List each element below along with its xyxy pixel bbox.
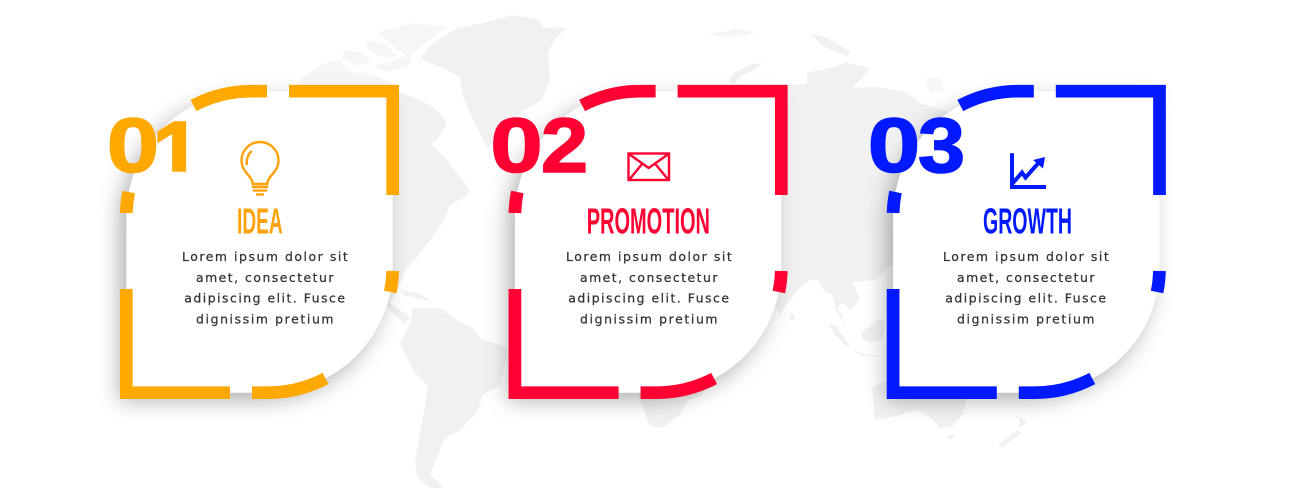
number 02: 0 xyxy=(490,103,543,189)
heading: growth: GROWTH xyxy=(983,200,1072,241)
map: new zealand south xyxy=(998,430,1022,447)
text block: adipiscing elit. Fusce xyxy=(568,291,729,306)
map: sumatra xyxy=(828,322,850,347)
icon: envelope xyxy=(628,154,669,180)
panel: promotion xyxy=(490,91,781,401)
number 02 xyxy=(490,103,588,189)
map: borneo xyxy=(862,318,885,343)
map: south america xyxy=(400,308,508,488)
card xyxy=(126,91,393,393)
map: arctic islands xyxy=(300,23,447,86)
text block xyxy=(943,249,1109,326)
map: eurasia xyxy=(700,62,1000,328)
text block: Lorem ipsum dolor sit xyxy=(943,249,1109,264)
text block xyxy=(182,249,348,326)
icon: light bulb xyxy=(242,142,278,194)
panel: growth xyxy=(868,91,1160,401)
text block: Lorem ipsum dolor sit xyxy=(182,249,348,264)
card xyxy=(893,91,1160,393)
text block: dignissim pretium xyxy=(196,311,334,326)
card xyxy=(515,91,781,393)
map: novaya zemlya xyxy=(811,34,850,56)
map: java xyxy=(853,350,883,357)
number 02: 2 xyxy=(541,104,588,189)
text block xyxy=(566,249,732,326)
text block: Lorem ipsum dolor sit xyxy=(566,249,732,264)
text block: adipiscing elit. Fusce xyxy=(184,291,345,306)
text block: adipiscing elit. Fusce xyxy=(945,291,1106,306)
map: cuba xyxy=(400,290,433,302)
text block: amet, consectetur xyxy=(196,270,334,285)
map: svalbard xyxy=(705,28,755,37)
text block: amet, consectetur xyxy=(957,270,1095,285)
number 01: 1 xyxy=(152,104,202,204)
text block: dignissim pretium xyxy=(957,311,1094,326)
icon: growth chart xyxy=(1010,153,1046,189)
number 03: 3 xyxy=(918,104,965,189)
map: africa xyxy=(600,300,780,428)
dashed frame xyxy=(126,91,393,393)
map: greenland xyxy=(420,15,567,148)
map: australia xyxy=(872,380,967,428)
number 03: 0 xyxy=(868,103,920,189)
map: sri lanka xyxy=(790,313,794,320)
world map xyxy=(300,15,1027,488)
heading: promotion: PROMOTION xyxy=(587,200,710,241)
map: north america xyxy=(340,90,470,325)
dashed frame xyxy=(893,91,1160,393)
map: east asia islands xyxy=(925,78,945,92)
dashed frame xyxy=(515,91,781,393)
map: new zealand north xyxy=(1013,413,1027,430)
text block: amet, consectetur xyxy=(580,270,718,285)
number 03 xyxy=(868,103,965,189)
number 01 xyxy=(110,117,186,174)
heading: idea: IDEA xyxy=(237,200,283,241)
card shadow xyxy=(508,99,774,401)
panel: idea xyxy=(107,91,393,401)
card shadow xyxy=(119,99,386,401)
text block: dignissim pretium xyxy=(580,311,718,326)
map: scandinavia xyxy=(728,62,763,84)
number 01: 0 xyxy=(107,103,159,189)
map: tasmania xyxy=(947,435,955,441)
card shadow xyxy=(886,99,1152,401)
